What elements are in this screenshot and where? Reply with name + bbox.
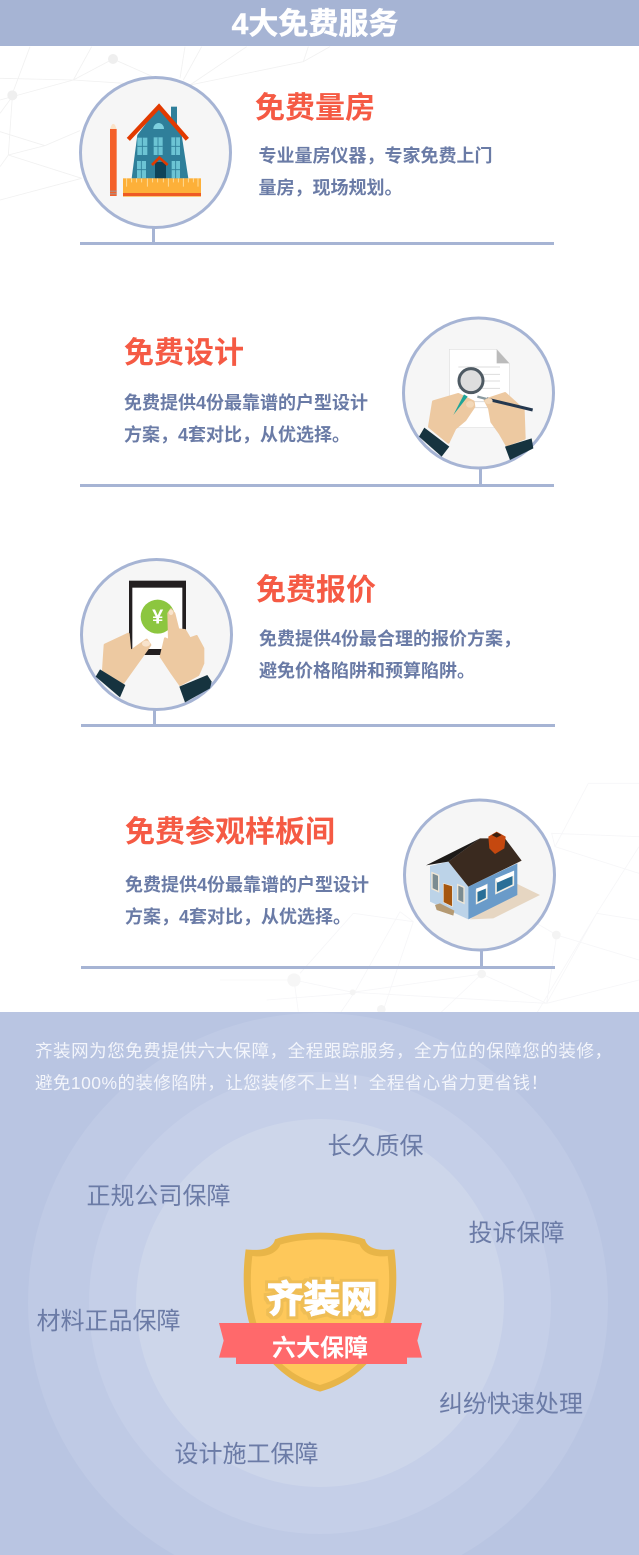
badge: shield with ribbon: 齐装网	[266, 1279, 378, 1320]
icon: hands with tablet	[96, 581, 212, 702]
heading: 免费参观样板间	[125, 816, 335, 849]
intro text: 齐装网为您免费提供六大保障，全程跟踪服务，全方位的保障您的装修，	[35, 1041, 612, 1061]
description: 免费提供4份最靠谱的户型设计	[124, 392, 368, 413]
icon: blue isometric house	[426, 832, 540, 919]
description: 免费提供4份最靠谱的户型设计	[125, 874, 369, 895]
guarantee labels: 材料正品保障	[36, 1308, 180, 1335]
badge: shield with ribbon	[219, 1233, 422, 1392]
panel: free showroom visit: 方案，4套对比，从优选择。	[125, 906, 351, 927]
panel: six guarantees: 避免100%的装修陷阱，让您装修不上当！全程省心省力更省钱！	[35, 1073, 548, 1093]
heading: 免费量房	[255, 92, 375, 125]
panel: free design: 方案，4套对比，从优选择。	[124, 424, 350, 445]
title: 4大免费服务	[232, 8, 398, 41]
icon: house with ruler and pencil	[110, 107, 201, 197]
heading: 免费设计	[124, 337, 244, 370]
concentric background circles	[28, 1013, 608, 1555]
panel: free design	[80, 318, 554, 487]
guarantee labels: 正规公司保障	[86, 1183, 230, 1210]
description: 免费提供4份最合理的报价方案，	[259, 628, 521, 649]
panel: free measuring: 量房，现场规划。	[258, 178, 402, 198]
panel: free quote	[81, 560, 555, 727]
icon: hands with tablet: ¥	[152, 607, 164, 629]
panel: free measuring	[80, 78, 554, 245]
description: 专业量房仪器，专家免费上门	[258, 145, 492, 166]
header bar	[0, 0, 639, 46]
guarantee labels: 投诉保障	[468, 1220, 564, 1247]
panel: free quote: 避免价格陷阱和预算陷阱。	[259, 660, 475, 681]
panel: free showroom visit	[81, 800, 555, 969]
guarantee labels	[36, 1133, 583, 1468]
guarantee labels: 长久质保	[328, 1133, 424, 1160]
icon: hands with magnifier and pen	[419, 349, 533, 460]
panel: six guarantees	[0, 1012, 639, 1555]
heading: 免费报价	[256, 574, 376, 607]
guarantee labels: 纠纷快速处理	[439, 1391, 583, 1418]
badge: shield with ribbon: 六大保障	[272, 1335, 368, 1362]
guarantee labels: 设计施工保障	[174, 1441, 318, 1468]
